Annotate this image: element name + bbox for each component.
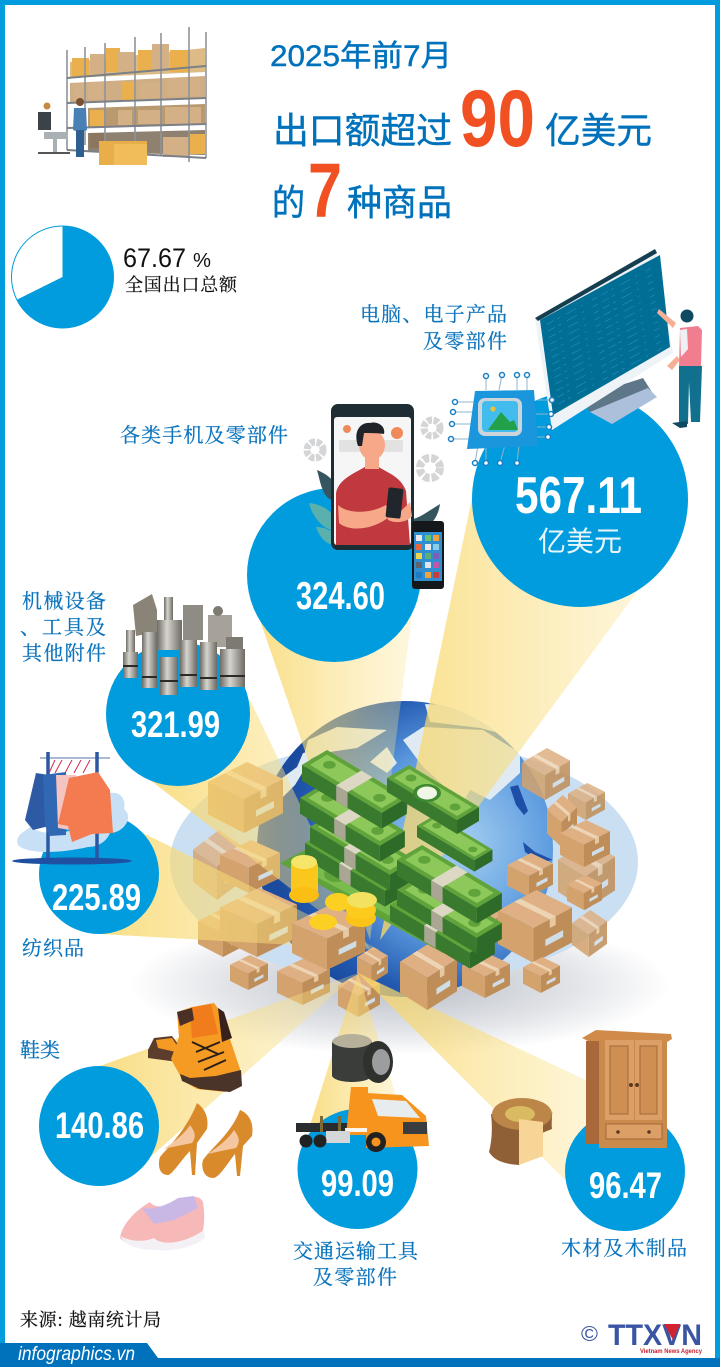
label: computers bbox=[360, 298, 507, 354]
share value and caption: 全国出口总额 bbox=[125, 271, 238, 297]
circle: transport value: 99.09 bbox=[321, 1163, 394, 1204]
circle: mobile phones value: 324.60 bbox=[296, 575, 385, 618]
gold coins bbox=[289, 855, 377, 930]
title: 亿美元 bbox=[545, 110, 652, 151]
icon: tree stump bbox=[489, 1098, 552, 1165]
icon: leather boot bbox=[148, 1003, 242, 1092]
icon: stack of tires bbox=[332, 1034, 393, 1083]
label: machinery bbox=[20, 585, 106, 666]
stacks of dollar bills bbox=[280, 750, 502, 969]
footer bar with site name: infographics.vn bbox=[18, 1344, 135, 1365]
circle: computers value: 亿美元 bbox=[538, 526, 622, 557]
icon: children's sneakers bbox=[120, 1196, 205, 1250]
label: mobile phones: 各类手机及零部件 bbox=[120, 419, 288, 448]
logo: TTXVN: © bbox=[581, 1323, 599, 1346]
title: 2025年前7月 bbox=[270, 40, 452, 73]
title: 的 bbox=[272, 182, 305, 223]
circle: footwear value bbox=[39, 1066, 159, 1186]
logo: TTXVN: TTXVN bbox=[608, 1319, 702, 1352]
label: machinery: 机械设备 bbox=[22, 585, 106, 614]
title bbox=[270, 40, 652, 234]
circle: footwear value: 140.86 bbox=[55, 1105, 144, 1146]
pie chart: 67.67% share bbox=[12, 226, 114, 328]
title: 种商品 bbox=[347, 182, 452, 223]
label: textiles: 纺织品 bbox=[22, 932, 84, 961]
icon: high heels bbox=[159, 1103, 252, 1178]
label: computers: 及零部件 bbox=[423, 325, 507, 354]
share value and caption: 67.67 bbox=[123, 243, 186, 273]
circle: mobile phones value bbox=[247, 488, 421, 662]
circle: machinery value: 321.99 bbox=[131, 704, 220, 745]
title: 7 bbox=[308, 148, 342, 234]
circle: wood value bbox=[565, 1111, 685, 1231]
circle: machinery value bbox=[106, 642, 250, 786]
icon: microchip bbox=[448, 372, 554, 466]
label: transport: 交通运输工具 bbox=[293, 1235, 419, 1264]
label: machinery: 其他附件 bbox=[22, 637, 106, 666]
logo: TTXVN bbox=[581, 1319, 702, 1355]
label: machinery: 、工具及 bbox=[20, 611, 106, 640]
cargo boxes behind beams bbox=[193, 762, 388, 1017]
light beams from globe to value circles bbox=[100, 498, 662, 1180]
share value and caption bbox=[123, 243, 238, 297]
label: transport: 及零部件 bbox=[313, 1261, 397, 1290]
source note: 来源: 越南统计局 bbox=[20, 1306, 161, 1332]
icon: orange truck bbox=[296, 1087, 429, 1152]
circle: textiles value bbox=[39, 814, 159, 934]
circle: textiles value: 225.89 bbox=[52, 877, 141, 918]
icon: man in smartphone bbox=[309, 404, 440, 550]
globe with cargo scene background bbox=[157, 701, 644, 1048]
icon: smartphone with apps bbox=[412, 521, 444, 589]
circle: computers value: 567.11 bbox=[515, 467, 642, 525]
label: footwear: 鞋类 bbox=[20, 1034, 60, 1063]
icon: monitor with code bbox=[535, 249, 673, 430]
footer bar with site name bbox=[0, 1343, 720, 1367]
logo: TTXVN: Vietnam News Agency bbox=[640, 1348, 702, 1355]
share value and caption: % bbox=[193, 250, 211, 272]
circle: computers value bbox=[472, 391, 688, 607]
icon: wooden wardrobe bbox=[582, 1030, 672, 1148]
icon: warehouse racks and workers bbox=[38, 27, 206, 165]
circle: wood value: 96.47 bbox=[589, 1165, 662, 1206]
label: wood: 木材及木制品 bbox=[561, 1232, 687, 1261]
circle: transport value bbox=[298, 1109, 418, 1229]
icon: machine tools bbox=[123, 594, 245, 695]
icon: clothes rack bbox=[12, 752, 132, 864]
label: transport bbox=[293, 1235, 419, 1290]
cargo boxes in front of beams bbox=[292, 748, 615, 1010]
icon: person at monitor bbox=[657, 309, 702, 428]
title: 90 bbox=[460, 74, 535, 164]
title: 出口额超过 bbox=[273, 110, 452, 151]
icon: gears bbox=[307, 420, 440, 478]
label: computers: 电脑、电子产品 bbox=[360, 298, 507, 327]
